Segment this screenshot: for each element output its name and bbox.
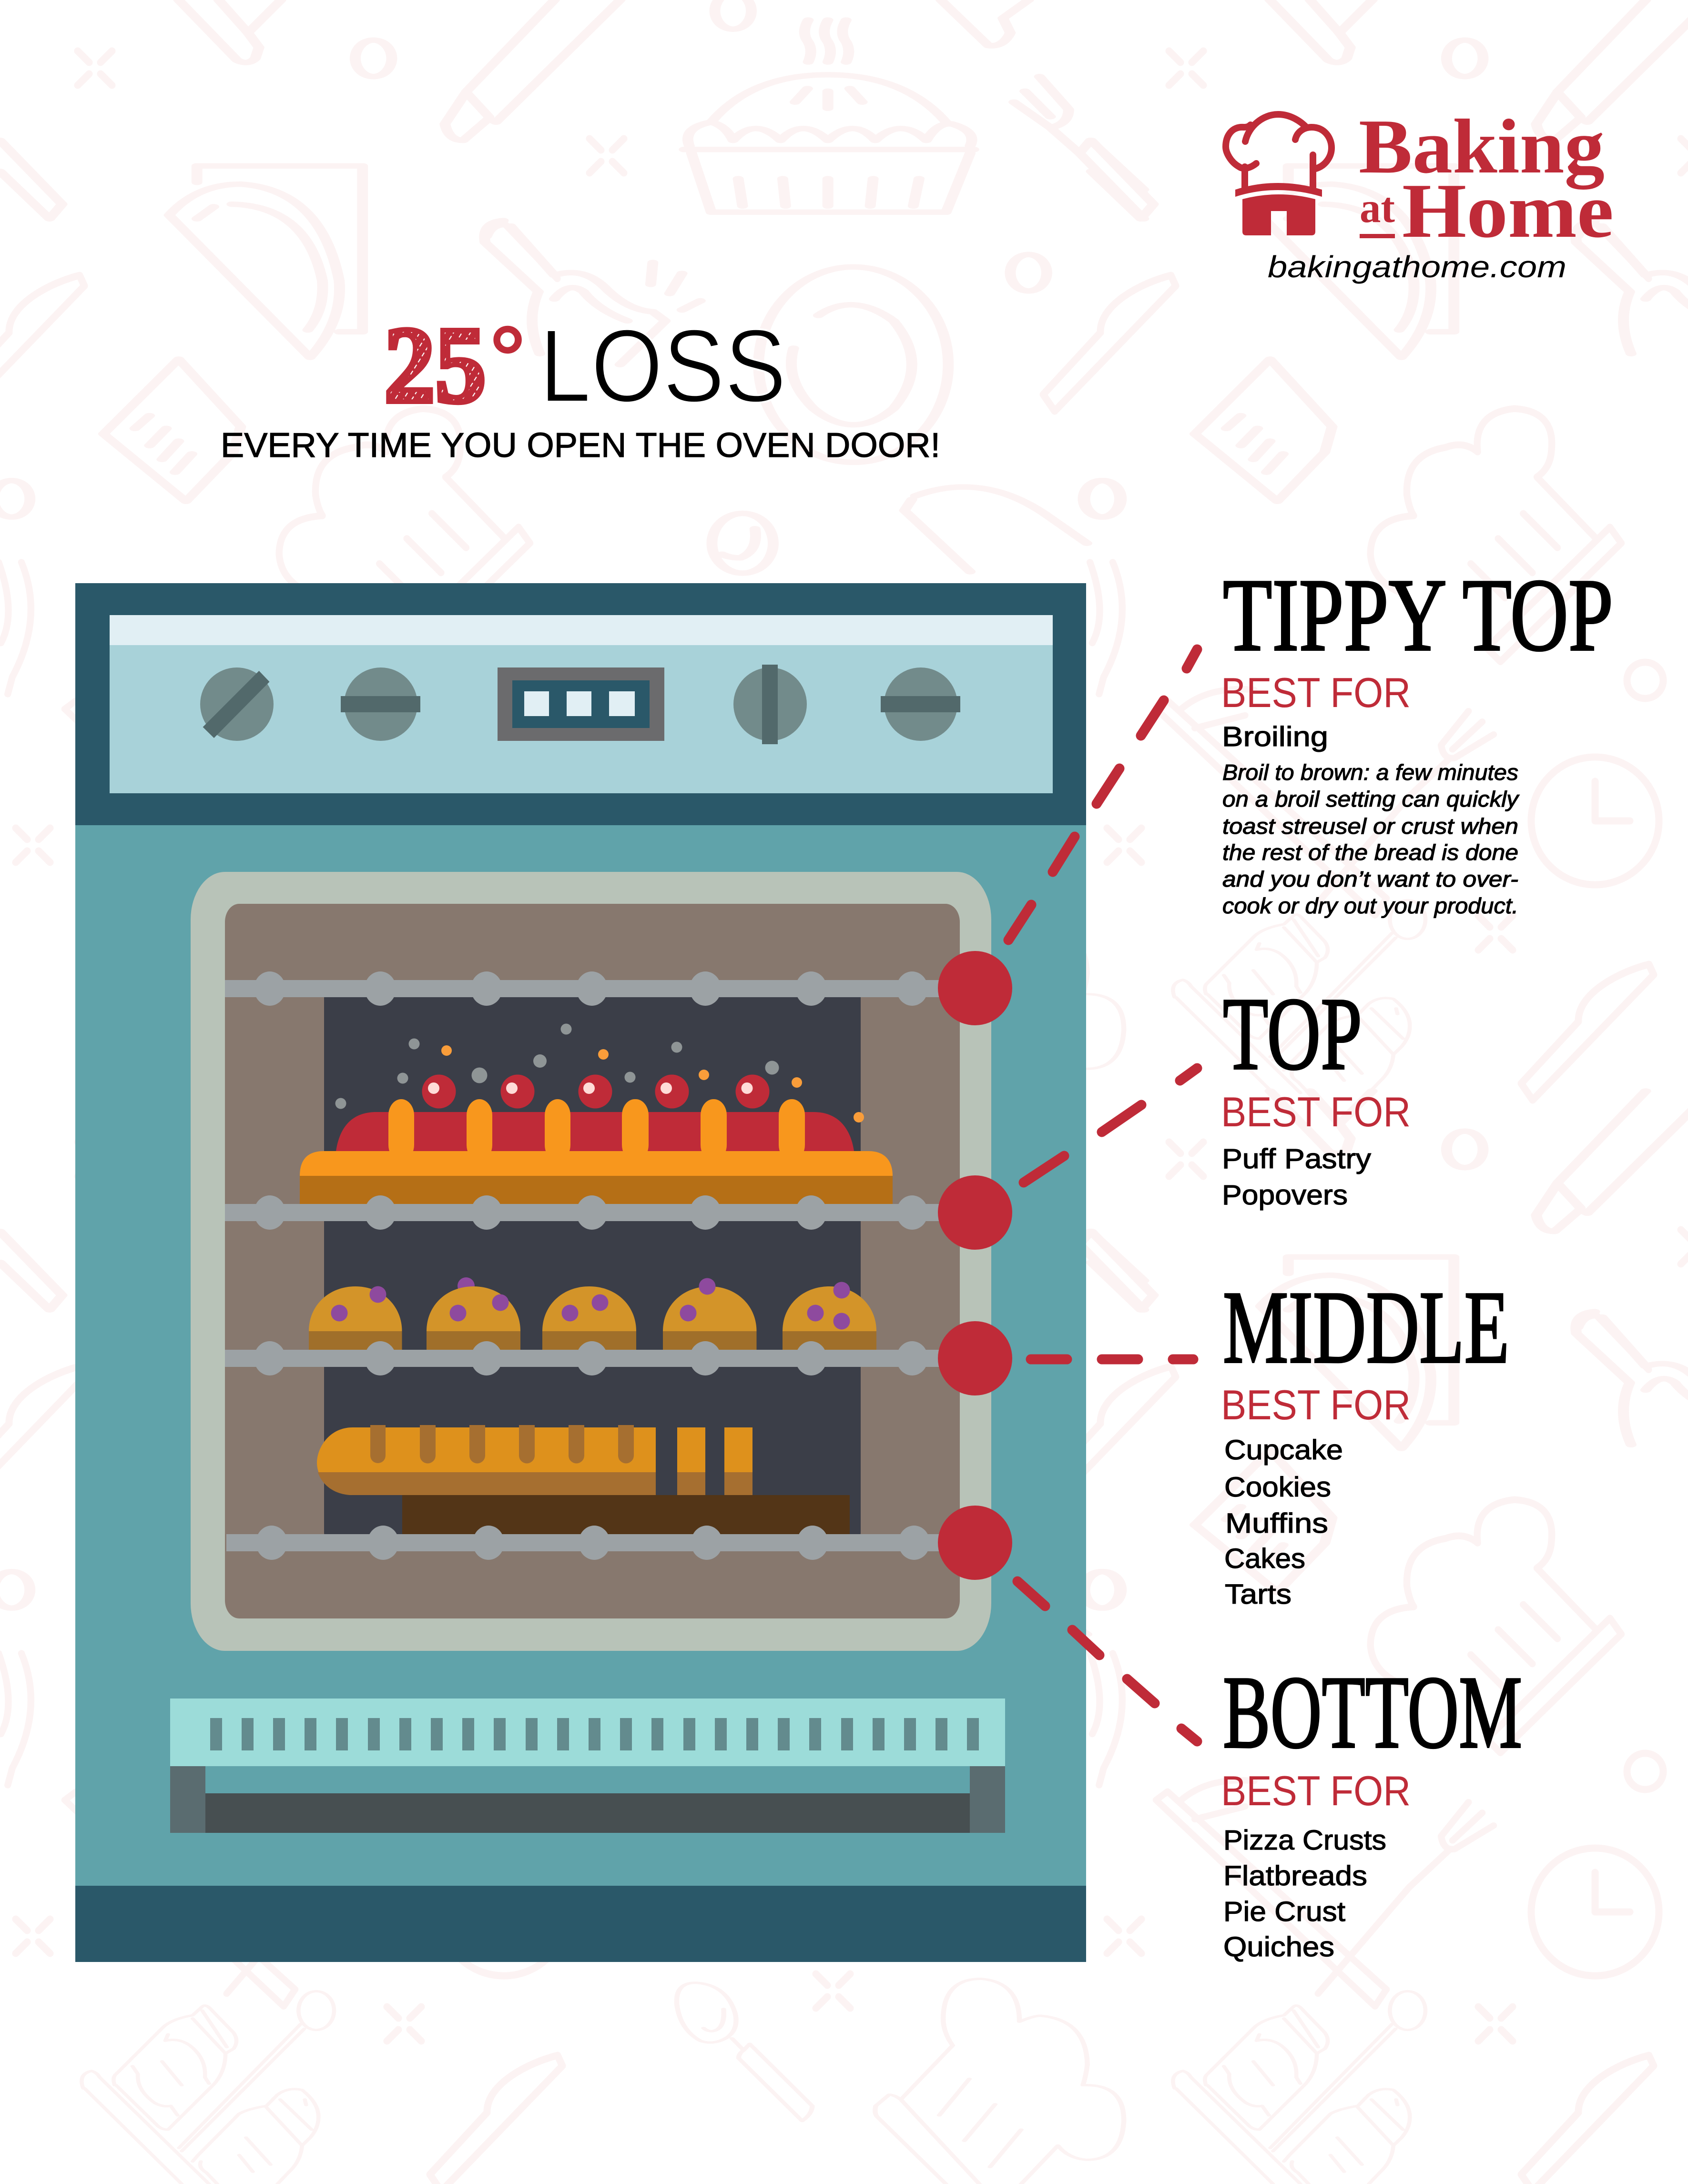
oven rack 2 (225, 1195, 959, 1230)
description paragraph: Broil to brown: a few minutes (1222, 760, 1518, 785)
heading: BOTTOM (1223, 1655, 1522, 1770)
word LOSS: LOSS (539, 308, 786, 424)
items: Cookies (1224, 1472, 1331, 1503)
knob 2 (341, 667, 420, 741)
description paragraph: and you don’t want to over- (1222, 867, 1518, 891)
lattice strips (388, 1099, 805, 1161)
oven illustration (75, 583, 1086, 1962)
icon: chef hat (1226, 114, 1332, 235)
dashed connector: middle (1031, 1354, 1193, 1365)
knob 3 (733, 665, 807, 744)
oven base band (75, 1886, 1086, 1962)
cutting board (402, 1495, 850, 1534)
panel: middle rack (1221, 1270, 1509, 1610)
item: Broiling (1222, 721, 1328, 752)
degree sign: ° (489, 307, 526, 408)
oven rack 1 (225, 971, 959, 1006)
brand name: Home: Home (1402, 168, 1614, 254)
best for label: BEST FOR (1221, 1088, 1411, 1135)
logo: Baking at Home (1226, 104, 1614, 284)
brand word: at: at (1360, 184, 1395, 232)
tart filling (336, 1112, 854, 1151)
best for label: BEST FOR (1221, 1381, 1411, 1428)
description paragraph: cook or dry out your product. (1222, 893, 1518, 918)
dashed connector: tippy top (1008, 649, 1197, 940)
muffin 1 (309, 1286, 402, 1350)
description paragraph: toast streusel or crust when (1222, 814, 1518, 839)
muffin 5 (783, 1286, 876, 1350)
knob 1 (200, 667, 274, 741)
website: bakingathome.com (1268, 250, 1566, 284)
items: Pie Crust (1223, 1896, 1345, 1927)
dashed connector: bottom (1017, 1581, 1197, 1741)
vent slots (210, 1718, 979, 1750)
items: Quiches (1223, 1931, 1334, 1962)
title: 25 degree loss (221, 304, 940, 465)
oven rack 4 (226, 1526, 959, 1560)
digital display (498, 667, 664, 741)
cherries (422, 1075, 769, 1108)
heading: MIDDLE (1223, 1270, 1509, 1385)
dashed connector: top (1024, 1068, 1197, 1183)
items (1224, 1435, 1343, 1610)
baked goods: muffins (309, 1277, 876, 1350)
description paragraph: on a broil setting can quickly (1222, 787, 1520, 811)
bread score marks (370, 1425, 634, 1464)
control panel (110, 615, 1053, 793)
muffin 2 (427, 1286, 520, 1350)
oven cavity (324, 981, 861, 1541)
sparks (336, 1023, 779, 1109)
number 25 with scratched texture: 25 (384, 304, 486, 425)
panel: top rack (1221, 977, 1411, 1211)
description paragraph (1222, 760, 1520, 918)
items: Pizza Crusts (1223, 1825, 1386, 1856)
items: Muffins (1225, 1508, 1328, 1539)
description paragraph: the rest of the bread is done (1222, 840, 1518, 865)
items: Flatbreads (1223, 1860, 1367, 1891)
muffin 3 (542, 1286, 636, 1350)
items: Cupcake (1224, 1435, 1343, 1466)
oven body (75, 825, 1086, 1886)
subtitle: EVERY TIME YOU OPEN THE OVEN DOOR! (221, 426, 940, 465)
oven door interior (225, 904, 960, 1618)
items (1222, 1143, 1371, 1211)
baked goods: baguette on cutting board (317, 1425, 850, 1534)
muffin 4 (663, 1286, 757, 1350)
knob 4 (881, 667, 960, 741)
oven top band (75, 583, 1086, 825)
oven door frame (191, 872, 991, 1651)
best for label: BEST FOR (1221, 1767, 1411, 1814)
panel: bottom rack (1221, 1655, 1522, 1962)
rack marker dots (938, 951, 1012, 1580)
items: Puff Pastry (1222, 1143, 1371, 1174)
heading: TOP (1223, 977, 1362, 1092)
items (1223, 1825, 1386, 1962)
items: Tarts (1225, 1579, 1291, 1610)
best for label: BEST FOR (1221, 669, 1411, 716)
brand name: Baking: Baking (1359, 104, 1605, 190)
blueberries (331, 1278, 850, 1329)
items: Popovers (1222, 1180, 1348, 1211)
panel: tippy top rack (1221, 558, 1613, 918)
baked goods: cherry tart (300, 1023, 893, 1204)
oven rack 3 (225, 1341, 959, 1375)
bottom vent and drawer (170, 1699, 1005, 1833)
tart crust (300, 1151, 893, 1176)
items: Cakes (1224, 1543, 1305, 1574)
